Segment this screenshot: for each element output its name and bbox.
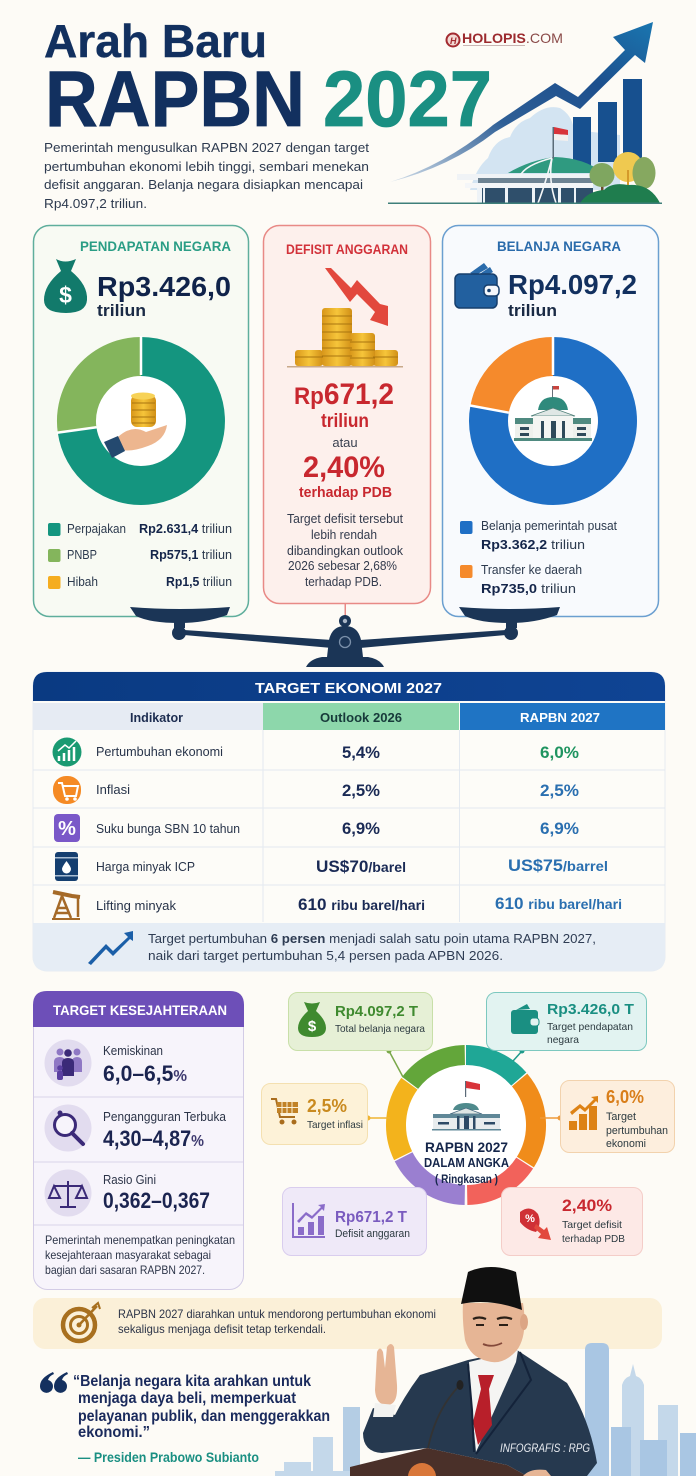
label: rasio gini [103,1172,210,1213]
label: rasio gini: Rasio Gini [103,1172,156,1187]
panel: pendapatan negara [34,226,248,616]
card: target pendapatan negara: Rp3.426,0 T [547,1001,634,1018]
card: target pertumbuhan ekonomi: pertumbuhan [606,1125,668,1137]
row labels: Lifting minyak [96,898,176,913]
description: 2026 sebesar 2,68% [288,559,397,573]
outlook 2026 values: 5,4% [342,743,380,762]
card: defisit anggaran: Defisit anggaran [335,1228,410,1240]
heading: PENDAPATAN NEGARA [80,238,231,254]
outlook 2026 values: 2,5% [342,781,380,800]
panel: defisit anggaran: 2,40% [303,451,385,484]
quote: — Presiden Prabowo Subianto [78,1449,259,1465]
rapbn 2027 values: 6,0% [540,743,579,762]
panel: target kesejahteraan [33,991,244,1290]
title: RAPBN 2027: RAPBN [45,54,305,143]
table footer note: naik dari target pertumbuhan 5,4 persen pada APBN 2026. [148,948,503,963]
legend: Belanja pemerintah pusat [481,518,617,533]
icon: hand holding coins [104,392,167,458]
icon: percent [54,814,80,842]
panel heading [33,991,244,1027]
table title bar [33,672,665,701]
legend: Hibah [67,575,98,589]
skyline background [275,1343,696,1476]
card: defisit anggaran: Rp671,2 T [335,1209,407,1226]
note: bagian dari sasaran RAPBN 2027. [45,1263,205,1277]
icon: money bag [298,1002,326,1037]
rising arrow [390,22,653,182]
icon: coin stacks [287,308,403,368]
row labels [96,744,240,913]
intro paragraph: Pemerintah mengusulkan RAPBN 2027 dengan target [44,140,369,155]
card: target inflasi [262,1084,368,1144]
credit: INFOGRAFIS : RPG [500,1441,590,1455]
icon: wallet [455,263,499,308]
panel: belanja negara: triliun [508,301,557,320]
legend: PNBP [67,548,97,562]
label: pengangguran terbuka [103,1109,227,1151]
panel: target ekonomi table [33,672,665,971]
quote: pelayanan publik, dan menggerakkan [78,1408,330,1425]
intro paragraph [44,140,369,211]
value: Rp4.097,2 [508,269,637,300]
card: target pertumbuhan ekonomi [560,1080,674,1152]
quote: ekonomi.” [78,1424,150,1441]
row labels: Harga minyak ICP [96,859,195,874]
legend [48,522,232,589]
panel: defisit anggaran: terhadap PDB [299,484,392,501]
column headers [33,703,665,730]
value: Rp3.426,0 [97,271,231,302]
title: RAPBN 2027: 2027 [323,54,492,143]
ring diagram: RAPBN 2027 dalam angka [366,1048,562,1195]
center labels: ( Ringkasan ) [435,1174,498,1186]
card: target inflasi: Target inflasi [307,1119,363,1131]
value: Rp671,2 [294,378,394,411]
icon: percent: % [58,818,76,840]
panel: belanja negara [442,226,658,616]
icon: quotation marks [40,1372,68,1393]
intro paragraph: defisit anggaran. Belanja negara disiapkan mencapai [44,177,363,192]
note: Pemerintah menempatkan peningkatan [45,1233,235,1247]
quote [40,1372,330,1465]
outlook 2026 values: 610 ribu barel/hari [298,895,425,914]
column headers: Indikator [130,710,183,725]
card: target pertumbuhan ekonomi: Target [606,1111,636,1123]
banner: summary: RAPBN 2027 diarahkan untuk mendorong pertumbuhan ekonomi [118,1307,436,1321]
icon: magnifier [44,1104,92,1152]
center labels: DALAM ANGKA [424,1155,510,1170]
table footer note [33,923,665,971]
parliament building [457,157,603,203]
balance scale [130,604,560,667]
podium [350,1448,527,1476]
intro paragraph: pertumbuhan ekonomi lebih tinggi, sembari menekan [44,159,369,174]
panel: defisit anggaran [264,226,430,604]
center labels [424,1139,510,1186]
icon: falling arrow [325,268,388,326]
card: target defisit terhadap PDB: 2,40% [562,1196,612,1215]
rapbn 2027 values: 610 ribu barel/hari [495,894,622,913]
description: Target defisit tersebut [287,512,404,526]
row labels: Suku bunga SBN 10 tahun [96,821,240,836]
column headers: Outlook 2026 [320,710,402,725]
card: target pertumbuhan ekonomi: ekonomi [606,1138,646,1150]
banner: summary: sekaligus menjaga defisit tetap terkendali. [118,1322,326,1336]
icon: money bag: $ [308,1018,317,1035]
description: dibandingkan outlook [287,544,404,558]
shirt [469,1350,518,1452]
legend: Rp735,0 triliun [481,581,576,596]
ring segments [396,1055,536,1195]
tie [473,1375,494,1445]
card: target pendapatan negara: negara [547,1034,579,1046]
clouds [470,107,620,190]
icon: oil barrel [55,852,78,881]
card: target inflasi: 2,5% [307,1096,347,1116]
raised hand [375,1344,397,1405]
legend: Transfer ke daerah [481,562,582,577]
label: kemiskinan: 6,0–6,5% [103,1061,187,1086]
flag [552,127,568,159]
icon: falling percent [520,1208,551,1240]
icon: money bag: $ [59,282,72,308]
panel: pendapatan negara: triliun [97,301,146,320]
title: RAPBN 2027 [45,54,492,143]
icon: trend arrow [88,931,133,965]
icon: shopping cart [53,776,81,804]
peci hat [461,1267,522,1310]
table footer note: Target pertumbuhan 6 persen menjadi salah satu poin utama RAPBN 2027, [148,931,596,946]
donut chart [469,336,617,485]
note: kesejahteraan masyarakat sebagai [45,1248,211,1262]
label: rasio gini: 0,362–0,367 [103,1188,210,1213]
center labels: RAPBN 2027 [425,1139,508,1155]
card: total belanja negara: Total belanja negara [335,1023,425,1035]
connectors [366,1048,562,1120]
face [463,1303,525,1362]
label: kemiskinan [103,1043,187,1086]
icon: falling percent: % [525,1213,535,1225]
legend: Rp1,5 triliun [166,575,232,589]
quote: “Belanja negara kita arahkan untuk [73,1373,311,1390]
logo: Holopis: HOLOPIS.COM [462,30,563,46]
panel: defisit anggaran: triliun [321,411,369,432]
icon: money bag [44,259,87,313]
icon: wallet [511,1004,539,1034]
icon: government building [514,386,592,441]
card: target defisit terhadap PDB [502,1188,642,1256]
donut chart [57,336,205,486]
center building icon [432,1081,501,1130]
icon: oil pump [52,892,80,919]
card: target pendapatan negara: Target pendapatan [547,1021,633,1033]
outlook 2026 values [298,743,425,914]
icon: shopping cart [271,1099,298,1124]
description: terhadap PDB. [305,575,382,589]
label: pengangguran terbuka: Pengangguran Terbuka [103,1109,227,1124]
legend: Rp575,1 triliun [150,548,232,562]
card: target defisit terhadap PDB: Target defisit [562,1219,622,1231]
intro paragraph: Rp4.097,2 triliun. [44,196,147,211]
card: target defisit terhadap PDB: terhadap PDB [562,1233,625,1245]
header illustration: parliament, bars and rising arrow [388,22,662,204]
rapbn 2027 values [495,743,622,913]
outlook 2026 values: US$70/barel [316,857,406,876]
icon: chart [292,1203,325,1238]
description [287,512,404,589]
table title bar: TARGET EKONOMI 2027 [255,680,442,697]
illustration: speaker at podium [350,1267,597,1476]
legend: Rp2.631,4 triliun [139,522,232,536]
label: kemiskinan: Kemiskinan [103,1043,163,1058]
rapbn 2027 values: US$75/barrel [508,856,608,875]
logo: Holopis: H [450,36,457,46]
trees [580,152,660,203]
column headers: RAPBN 2027 [520,710,600,725]
growth bars [573,79,642,167]
icon: people [44,1040,92,1086]
row labels: Inflasi [96,782,130,797]
microphone [428,1380,464,1448]
icon: target with dart [63,1303,100,1341]
rapbn 2027 values: 2,5% [540,781,579,800]
panel heading: TARGET KESEJAHTERAAN [53,1002,227,1018]
icon: growth chart [569,1096,598,1130]
legend: Perpajakan [67,522,126,536]
legend [460,518,617,596]
description: lebih rendah [311,528,377,542]
quote: menjaga daya beli, memperkuat [78,1390,297,1407]
heading: BELANJA NEGARA [497,238,621,254]
icon: scales [44,1170,92,1216]
heading: DEFISIT ANGGARAN [286,242,408,257]
card: target pertumbuhan ekonomi: 6,0% [606,1087,644,1107]
card: total belanja negara [288,992,432,1050]
legend: Rp3.362,2 triliun [481,537,585,552]
card: target pendapatan negara [486,992,646,1050]
label: pengangguran terbuka: 4,30–4,87% [103,1126,204,1151]
icon: growth [52,738,82,766]
outlook 2026 values: 6,9% [342,819,380,838]
rapbn 2027 values: 6,9% [540,819,579,838]
row labels: Pertumbuhan ekonomi [96,744,223,759]
suit [363,1350,597,1476]
card: defisit anggaran [282,1188,426,1256]
panel: defisit anggaran: atau [332,435,358,450]
note [45,1233,235,1277]
card: total belanja negara: Rp4.097,2 T [335,1003,418,1020]
title: Arah Baru: Arah Baru [44,15,267,67]
banner: summary [33,1298,662,1349]
